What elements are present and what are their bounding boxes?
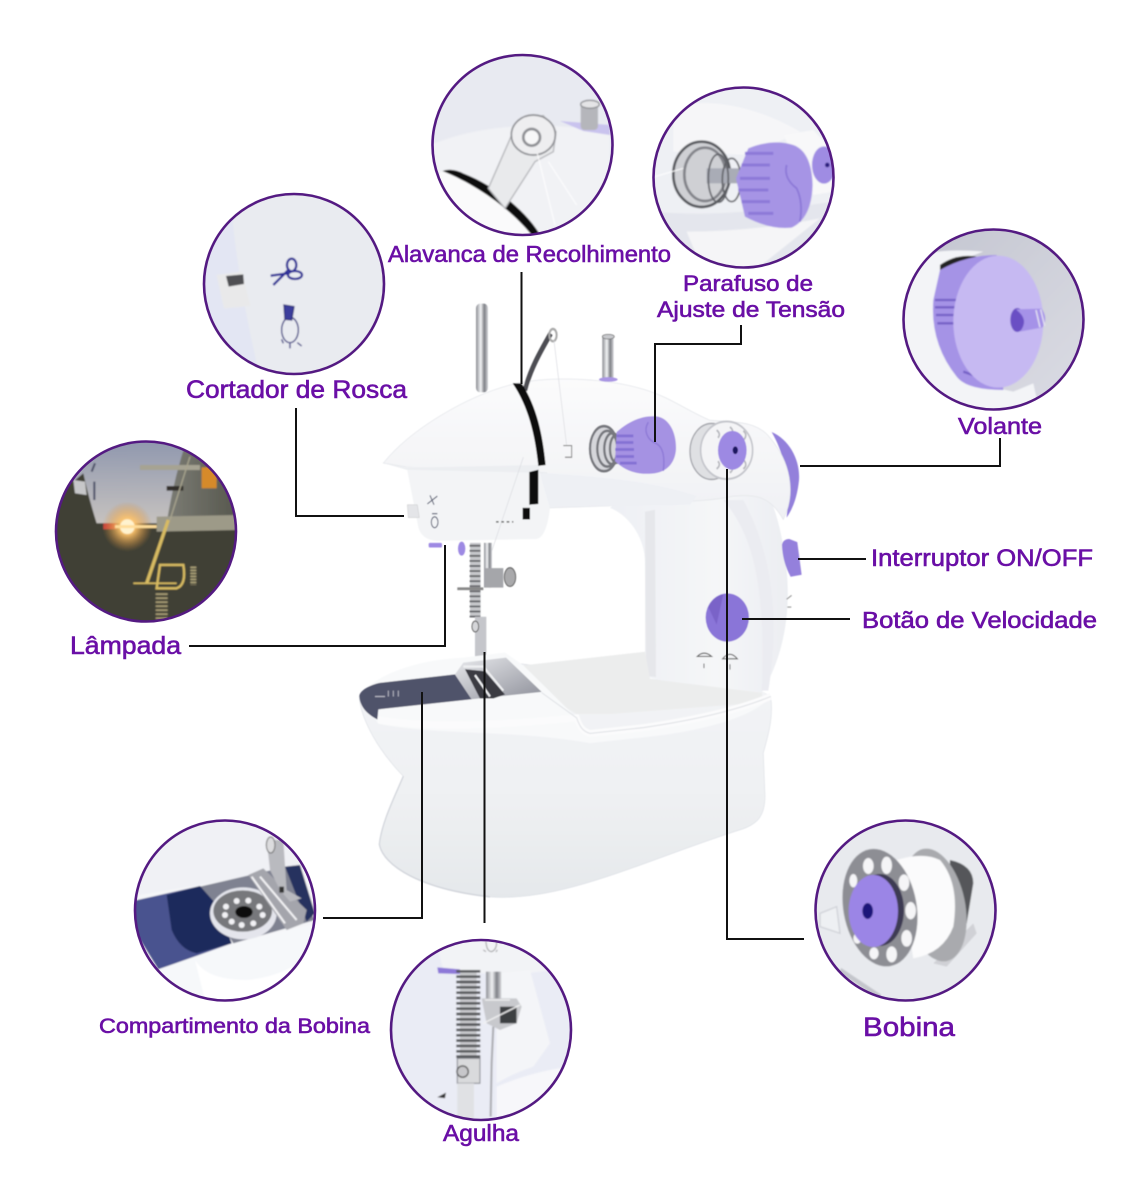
spring coils xyxy=(708,154,741,202)
left tab xyxy=(73,480,87,495)
rear shadow xyxy=(933,923,977,967)
needle plate xyxy=(455,658,542,699)
circle border xyxy=(204,194,384,374)
needle xyxy=(491,1027,493,1117)
thread xyxy=(655,168,683,177)
white curved body xyxy=(434,128,608,232)
head top xyxy=(437,937,553,973)
thread xyxy=(897,856,955,958)
light glow xyxy=(104,503,151,550)
bottom streak xyxy=(840,970,880,997)
bed recess xyxy=(542,693,771,733)
upper shading xyxy=(130,817,320,897)
housing shadow xyxy=(940,256,977,273)
horizontal band xyxy=(140,465,200,470)
wheel side ridges xyxy=(935,300,997,383)
background xyxy=(810,817,1000,1007)
purple knob xyxy=(736,142,813,228)
front flange xyxy=(834,843,926,972)
clamp xyxy=(482,998,522,1030)
scissors icon xyxy=(271,259,302,285)
white bed foreground xyxy=(158,923,317,1007)
right dark plate xyxy=(285,865,315,922)
speed marks L and H xyxy=(697,653,737,670)
line: bobbin xyxy=(727,469,804,939)
circle border xyxy=(432,55,612,235)
upper white xyxy=(673,103,800,155)
label: Cortador de Rosca: Cortador de Rosca xyxy=(186,376,407,404)
circle border xyxy=(391,940,571,1120)
retraction lever xyxy=(525,329,557,390)
bobbin cover xyxy=(359,674,472,719)
lower shadow band xyxy=(663,204,828,263)
sewing machine xyxy=(359,304,802,897)
upper pin xyxy=(560,100,610,135)
circle border xyxy=(904,230,1084,410)
panel: flywheel xyxy=(900,227,1087,413)
line: lamp xyxy=(189,545,445,646)
metal washer xyxy=(673,142,730,207)
line: thread cutter xyxy=(296,408,404,516)
presser foot shank xyxy=(457,1058,480,1123)
background xyxy=(900,227,1087,413)
wheel side xyxy=(933,255,1003,390)
label: Parafuso de Ajuste de Tensão: Parafuso de xyxy=(683,271,813,296)
photo background xyxy=(232,195,382,373)
metal needle plate xyxy=(248,868,307,930)
thread cutter tab xyxy=(407,505,419,518)
arm lower band xyxy=(157,515,240,532)
lower base shadow line xyxy=(379,776,490,897)
label: Agulha: Agulha xyxy=(443,1120,519,1146)
head rim shadow xyxy=(383,463,540,473)
lever eye xyxy=(488,115,556,208)
switch marking xyxy=(787,595,792,607)
panel: bobbin xyxy=(810,817,1000,1007)
bobbin winder xyxy=(690,421,753,479)
thread guide xyxy=(166,485,184,492)
speed button xyxy=(706,593,749,642)
flange holes xyxy=(849,857,916,962)
presser foot stem xyxy=(266,837,302,902)
bobbin xyxy=(210,887,277,939)
line: on/off switch xyxy=(798,558,866,560)
lamp icons xyxy=(92,463,95,500)
column curve shadow xyxy=(723,500,774,691)
wheel face xyxy=(953,256,1043,388)
label: Lâmpada: Lâmpada xyxy=(70,632,181,660)
stitch marks xyxy=(496,520,513,524)
on/off switch xyxy=(782,539,802,577)
label: Alavanca de Recolhimento: Alavanca de Recolhimento xyxy=(388,241,671,267)
circle border xyxy=(56,442,236,622)
tension knob xyxy=(615,416,676,474)
label: Compartimento da Bobina: Compartimento da Bobina xyxy=(99,1014,370,1038)
right body panel xyxy=(497,970,550,1083)
label: Parafuso de Ajuste de Tensão xyxy=(657,271,845,322)
orange part xyxy=(202,467,217,488)
black band xyxy=(443,170,539,235)
rear flange xyxy=(894,843,976,967)
bobbin bay xyxy=(200,867,315,943)
thread pin right xyxy=(599,334,618,382)
lower white wedge xyxy=(687,219,818,266)
thread pin left xyxy=(476,304,488,392)
spring xyxy=(460,970,477,1058)
label: Interruptor ON/OFF: Interruptor ON/OFF xyxy=(871,545,1093,572)
presser foot xyxy=(463,667,505,698)
machine base xyxy=(359,663,772,897)
leader lines xyxy=(189,272,1000,939)
label: Parafuso de Ajuste de Tensão: Ajuste de Tensão xyxy=(657,297,845,322)
right bed xyxy=(497,1067,573,1123)
machine head xyxy=(73,440,187,523)
thread guide xyxy=(563,446,572,457)
panel: bobbin compartment xyxy=(130,817,320,1007)
thread xyxy=(487,341,567,566)
label: Volante: Volante xyxy=(958,413,1042,439)
arrow mark xyxy=(437,1093,446,1098)
front cover xyxy=(130,886,232,969)
hub hole xyxy=(862,903,873,919)
dark background xyxy=(57,472,235,620)
purple levers xyxy=(429,542,465,556)
machine column xyxy=(610,477,788,693)
purple hub shadow xyxy=(856,874,904,946)
circle border xyxy=(135,820,315,1000)
machine arm and head xyxy=(383,379,790,520)
purple hub xyxy=(849,875,898,947)
arm underside strip xyxy=(540,473,697,507)
wheel shaft xyxy=(1010,308,1045,332)
feed bars xyxy=(252,877,297,923)
bed top surface xyxy=(359,653,771,743)
upper background xyxy=(168,451,233,517)
line: flywheel xyxy=(800,438,1000,466)
thread and presser xyxy=(133,457,193,623)
base curve xyxy=(195,950,317,1007)
background xyxy=(434,56,611,157)
white housing xyxy=(900,251,1040,413)
left side plane xyxy=(200,190,260,377)
table mark xyxy=(820,907,840,933)
lamp icon xyxy=(282,305,302,348)
threaded shaft xyxy=(707,168,740,183)
presser assembly xyxy=(457,543,516,663)
black stripe xyxy=(513,383,546,520)
panel: lamp xyxy=(50,437,243,627)
panel: tension screw xyxy=(650,83,840,273)
line: tension screw xyxy=(655,325,741,442)
red led strip xyxy=(103,523,117,529)
circle border xyxy=(816,820,996,1000)
dark rear cap xyxy=(947,860,973,937)
background xyxy=(387,937,577,1123)
back platform xyxy=(523,652,763,714)
needle bar xyxy=(486,972,501,1015)
background xyxy=(130,817,320,1007)
bed front highlight xyxy=(378,697,771,733)
circle border xyxy=(654,88,834,268)
small purple disc xyxy=(812,146,836,184)
bobbin winder behind xyxy=(786,131,832,194)
tension spring xyxy=(590,426,623,471)
line: speed button xyxy=(742,618,850,620)
purple lever xyxy=(437,967,460,974)
column side strip xyxy=(645,510,656,677)
panel: thread cutter xyxy=(200,190,390,380)
cutter tab xyxy=(218,273,245,307)
panel: needle xyxy=(387,937,577,1123)
line: needle xyxy=(484,652,486,923)
scissors and lamp icons xyxy=(427,495,438,528)
lower white area xyxy=(440,173,532,234)
line: retraction lever xyxy=(520,272,522,384)
thread xyxy=(536,153,540,162)
line: bobbin compartment xyxy=(323,692,422,918)
label: Botão de Velocidade: Botão de Velocidade xyxy=(862,607,1097,633)
flywheel xyxy=(772,432,799,518)
dark cover reflection xyxy=(167,886,232,953)
background xyxy=(655,89,831,214)
head lower box xyxy=(407,467,550,541)
label: Bobina: Bobina xyxy=(863,1012,956,1042)
lamp icon xyxy=(483,942,497,952)
panel: retraction lever xyxy=(427,52,617,242)
